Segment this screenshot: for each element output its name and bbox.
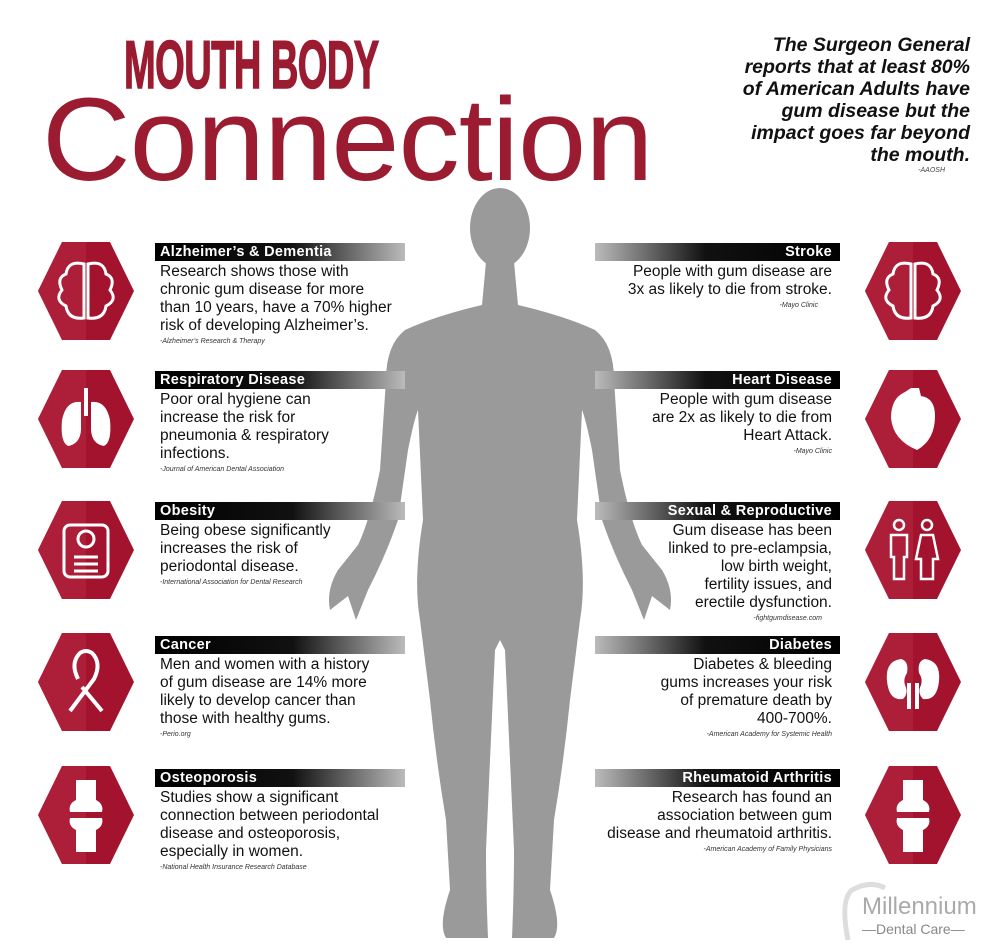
text: 3x as likely to die from stroke.	[628, 281, 832, 298]
text: -Mayo Clinic	[779, 302, 818, 309]
text: low birth weight,	[721, 558, 832, 575]
text: Sexual & Reproductive	[668, 503, 832, 519]
text: Poor oral hygiene can	[160, 391, 311, 408]
logo: —Dental Care—	[862, 921, 965, 937]
icon: kidneys hexagon	[865, 633, 961, 731]
bar: Stroke	[595, 243, 840, 261]
text: Heart Attack.	[743, 427, 832, 444]
text: increase the risk for	[160, 409, 295, 426]
bar: Rheumatoid	[595, 769, 840, 787]
text: -American Academy of Family Physicians	[703, 846, 832, 853]
text: Stroke	[785, 244, 832, 260]
text: periodontal disease.	[160, 558, 299, 575]
bar: Alzheimer's	[155, 243, 405, 261]
text: linked to pre-eclampsia,	[668, 540, 832, 557]
text: Alzheimer’s & Dementia	[160, 244, 332, 260]
text: -National Health Insurance Research Database	[160, 864, 307, 871]
text: than 10 years, have a 70% higher	[160, 299, 392, 316]
text: pneumonia & respiratory	[160, 427, 329, 444]
quote: -AAOSH	[918, 167, 945, 174]
text: -Perio.org	[160, 731, 191, 738]
text: -Mayo Clinic	[793, 448, 832, 455]
text: Heart Disease	[732, 372, 832, 388]
quote	[743, 34, 970, 174]
text: infections.	[160, 445, 230, 462]
text: -Alzheimer’s Research & Therapy	[160, 338, 265, 345]
icon: brain hexagon left	[38, 242, 134, 340]
text: connection between periodontal	[160, 807, 379, 824]
text: chronic gum disease for more	[160, 281, 364, 298]
icon: knee hexagon left	[38, 766, 134, 864]
text: -International Association for Dental Research	[160, 579, 303, 586]
bar: Heart	[595, 371, 840, 389]
text: People with gum disease	[660, 391, 832, 408]
text: disease and rheumatoid arthritis.	[607, 825, 832, 842]
quote: reports that at least 80%	[745, 56, 970, 78]
text: gums increases your risk	[661, 674, 832, 691]
quote: The Surgeon General	[773, 34, 970, 56]
text: Being obese significantly	[160, 522, 331, 539]
title: Connection	[42, 74, 652, 206]
text: fertility issues, and	[704, 576, 832, 593]
icon: lungs hexagon	[38, 370, 134, 468]
bar: Obesity	[155, 502, 405, 520]
bar: Sexual	[595, 502, 840, 520]
bar: Osteoporosis	[155, 769, 405, 787]
quote: the mouth.	[870, 144, 970, 166]
text: disease and osteoporosis,	[160, 825, 340, 842]
text: erectile dysfunction.	[695, 594, 832, 611]
text: Obesity	[160, 503, 215, 519]
icon: ribbon hexagon	[38, 633, 134, 731]
text: Men and women with a history	[160, 656, 369, 673]
text: -Journal of American Dental Association	[160, 466, 284, 473]
text: Research has found an	[672, 789, 832, 806]
quote: of American Adults have	[743, 78, 970, 100]
text: Diabetes & bleeding	[693, 656, 832, 673]
bar: Cancer	[155, 636, 405, 654]
quote: impact goes far beyond	[751, 122, 970, 144]
text: Respiratory Disease	[160, 372, 305, 388]
text: Rheumatoid Arthritis	[682, 770, 832, 786]
text: Osteoporosis	[160, 770, 257, 786]
icon: heart hexagon	[865, 370, 961, 468]
text: especially in women.	[160, 843, 303, 860]
text: risk of developing Alzheimer’s.	[160, 317, 369, 334]
text: increases the risk of	[160, 540, 298, 557]
text: are 2x as likely to die from	[652, 409, 832, 426]
title: MOUTH BODY	[124, 27, 379, 103]
text: likely to develop cancer than	[160, 692, 356, 709]
text: People with gum disease are	[633, 263, 832, 280]
text: Studies show a significant	[160, 789, 338, 806]
logo	[842, 882, 977, 940]
text: of premature death by	[680, 692, 832, 709]
text: Research shows those with	[160, 263, 349, 280]
quote: gum disease but the	[781, 100, 970, 122]
text: 400-700%.	[757, 710, 832, 727]
bar: Diabetes	[595, 636, 840, 654]
icon: people hexagon	[865, 501, 961, 599]
icon: scale hexagon	[38, 501, 134, 599]
icon: brain hexagon right	[865, 242, 961, 340]
text: association between gum	[657, 807, 832, 824]
bar: Respiratory	[155, 371, 405, 389]
text: -American Academy for Systemic Health	[707, 731, 832, 738]
icon: knee hexagon right	[865, 766, 961, 864]
text: of gum disease are 14% more	[160, 674, 367, 691]
text: those with healthy gums.	[160, 710, 331, 727]
text: -fightgumdisease.com	[754, 615, 822, 622]
text: Diabetes	[769, 637, 832, 653]
logo: Millennium	[862, 893, 977, 920]
text: Cancer	[160, 637, 211, 653]
text: Gum disease has been	[673, 522, 832, 539]
